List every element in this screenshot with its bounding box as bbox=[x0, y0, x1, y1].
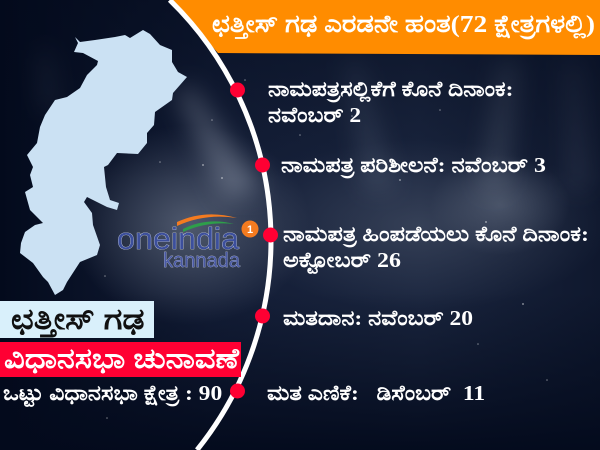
header text: ಛತ್ತೀಸ್ ಗಢ ಎರಡನೇ ಹಂತ(72 ಕ್ಷೇತ್ರಗಳಲ್ಲಿ) bbox=[212, 11, 595, 38]
election label: ವಿಧಾನಸಭಾ ಚುನಾವಣೆ bbox=[4, 344, 239, 375]
state label: ಛತ್ತೀಸ್ ಗಢ bbox=[11, 303, 145, 336]
total constituencies: ಒಟ್ಟು ವಿಧಾನಸಭಾ ಕ್ಷೇತ್ರ : 90 bbox=[3, 381, 222, 405]
milestone 2: ನಾಮಪತ್ರ ಪರಿಶೀಲನೆ: ನವೆಂಬರ್ 3 bbox=[281, 153, 546, 177]
logo: oneindia kannada: kannada bbox=[163, 250, 241, 272]
milestone 4: ಮತದಾನ: ನವೆಂಬರ್ 20 bbox=[283, 306, 473, 330]
header banner bbox=[173, 0, 600, 55]
milestone 5: ಮತ ಎಣಿಕೆ: ಡಿಸೆಂಬರ್ 11 bbox=[267, 381, 485, 405]
logo: oneindia kannada: 1 bbox=[247, 224, 253, 236]
milestone 3: ನಾಮಪತ್ರ ಹಿಂಪಡೆಯಲು ಕೊನೆ ದಿನಾಂಕ: ಅಕ್ಟೋಬರ್ 26 bbox=[283, 222, 589, 272]
milestone 1: ನಾಮಪತ್ರಸಲ್ಲಿಕೆಗೆ ಕೊನೆ ದಿನಾಂಕ: ನವೆಂಬರ್ 2 bbox=[268, 77, 513, 127]
logo: oneindia kannada: oneindia bbox=[117, 221, 240, 256]
